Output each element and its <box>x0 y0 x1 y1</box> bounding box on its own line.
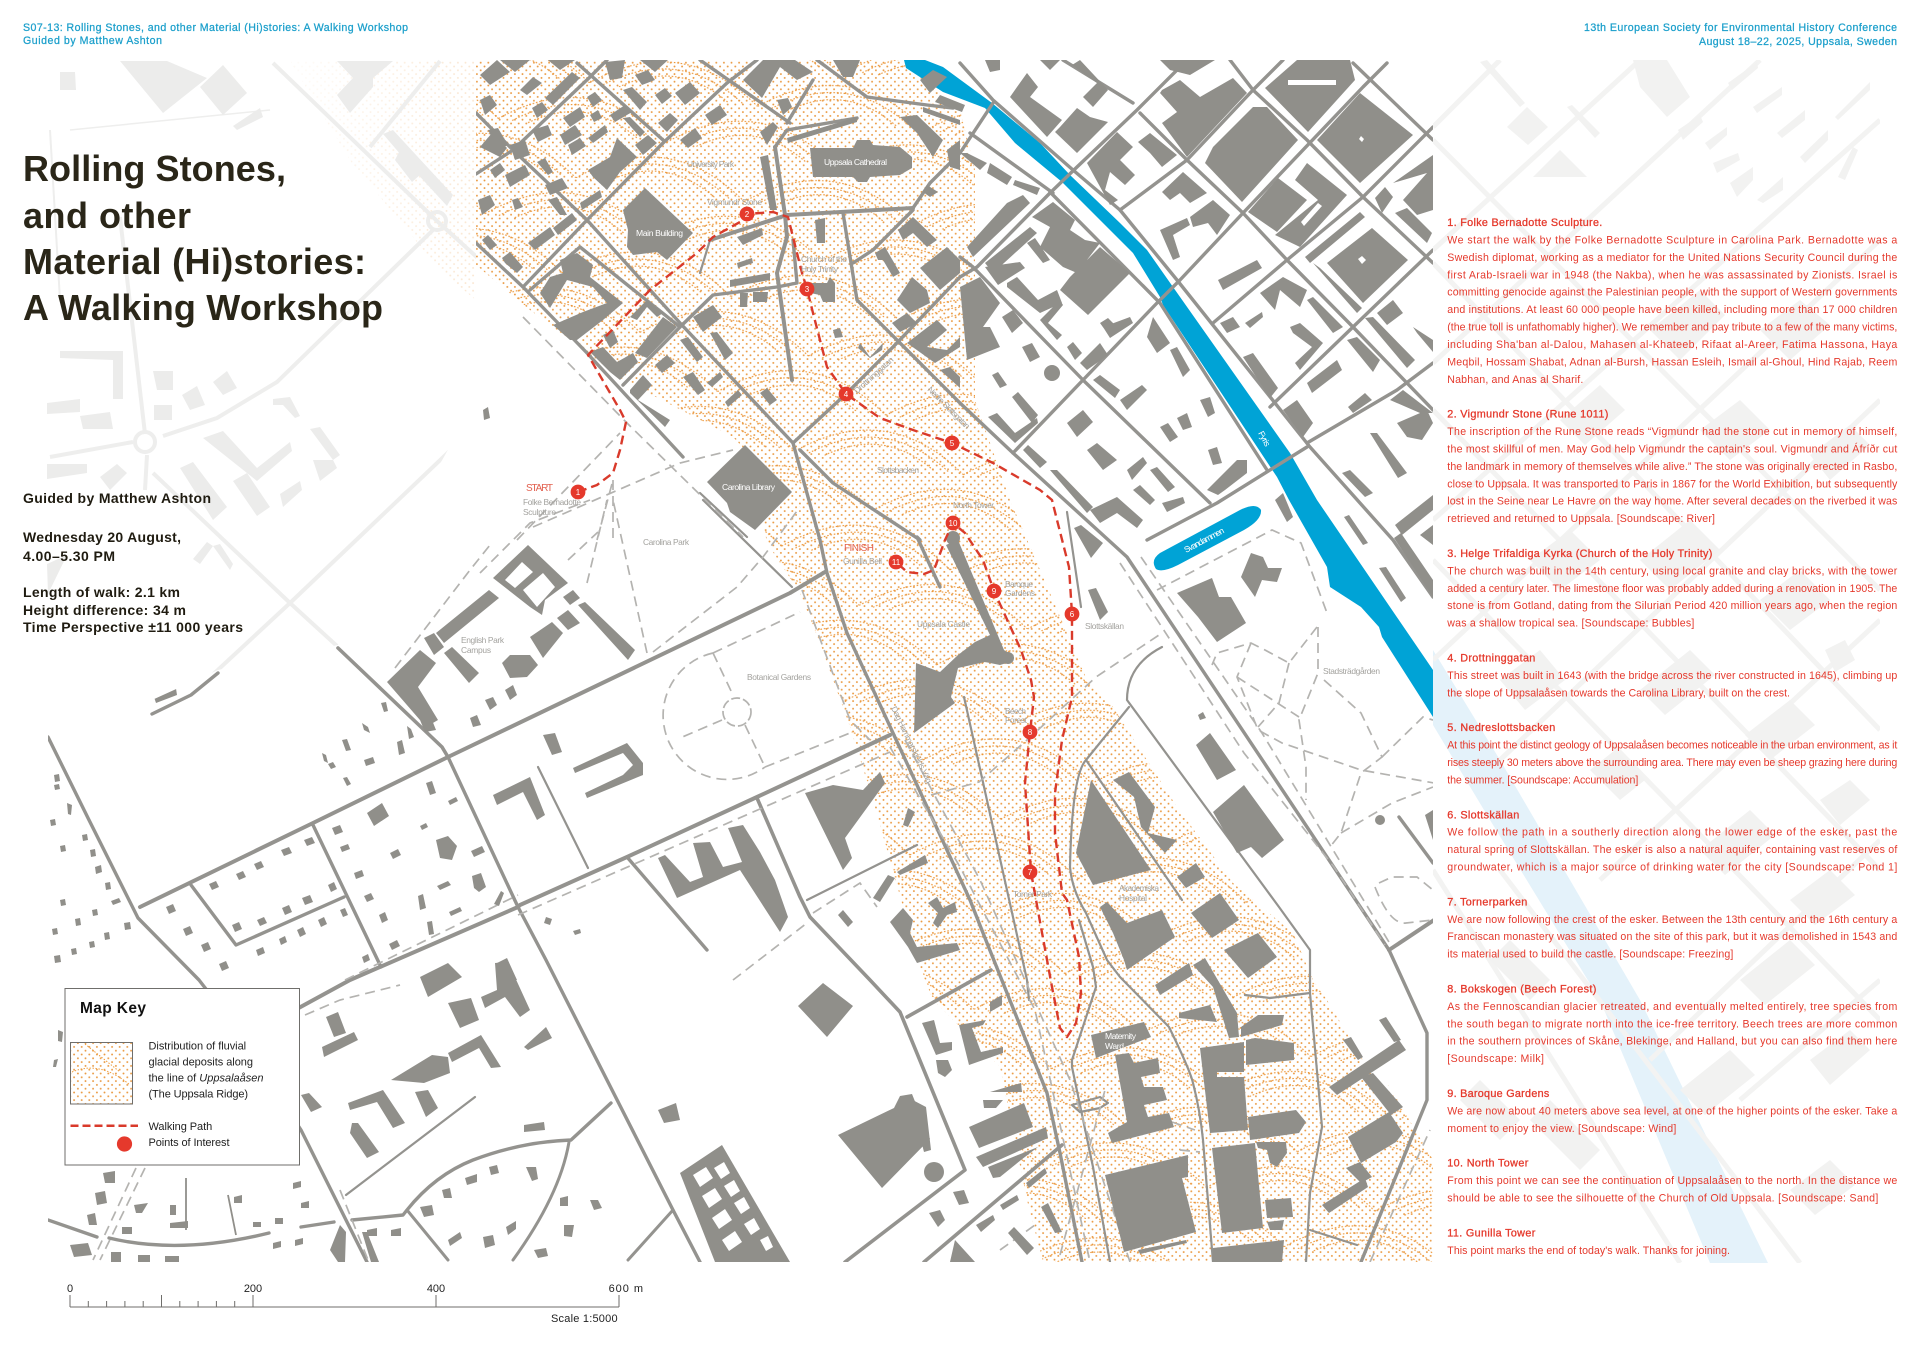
stop 8 text: As the Fennoscandian glacier retreated, and eventually melted entirely, tree species from <box>1447 1001 1897 1013</box>
title: Material (Hi)stories: <box>23 241 366 282</box>
stop 5 text: rises steeply 30 meters above the surrounding area. There may even be sheep grazing here during <box>1447 757 1897 769</box>
stop 1 text: Swedish diplomat, working as a mediator for the United Nations Security Council during the <box>1447 252 1897 264</box>
header left: session title <box>23 22 408 47</box>
stop 7 text <box>1447 896 1897 961</box>
map place labels: Carolina Library <box>722 482 776 492</box>
stop 2 text: the most skillful of men. May God help Vigmundr the captain's soul. Vigmundr and Áfríðr cut <box>1447 442 1897 456</box>
points of interest markers: 3 <box>805 285 810 294</box>
title <box>23 148 383 328</box>
stop 6 text: natural spring of Slottskällan. The esker is also a natural aquifer, containing vast reserves of <box>1447 844 1897 856</box>
walk details: Guided by Matthew Ashton <box>23 490 211 506</box>
stop 4 text <box>1447 652 1897 699</box>
walk details: 4.00–5.30 PM <box>23 548 115 564</box>
stop 8 text <box>1447 984 1897 1065</box>
small houses <box>50 702 581 1067</box>
map place labels: Folke Bernadotte <box>523 497 581 507</box>
points of interest markers: 2 <box>745 210 750 219</box>
pond Svandammen <box>1154 506 1261 570</box>
esker dot distribution <box>476 60 1433 1262</box>
map place labels: Fyris <box>1256 429 1273 448</box>
stop 4 text: the slope of Uppsalaåsen towards the Carolina Library, built on the crest. <box>1447 687 1790 699</box>
map key: the line of Uppsalaåsen <box>148 1072 263 1084</box>
ghost map: left faded continuation <box>47 60 480 680</box>
stop 7 text: 7. Tornerparken <box>1447 896 1527 908</box>
lower south road thin dashes <box>186 1178 236 1235</box>
stop 11 text: 11. Gunilla Tower <box>1447 1227 1536 1239</box>
header left: session title: S07-13: Rolling Stones, and other Material (Hi)stories: A Walking Workshop <box>23 22 408 34</box>
map place labels: North Tower <box>953 500 994 510</box>
stop 3 text: The church was built in the 14th century, using local granite and clay bricks, with the tower <box>1447 565 1898 577</box>
map key: (The Uppsala Ridge) <box>148 1088 248 1100</box>
map place labels: Ward <box>1105 1041 1124 1051</box>
map place labels: Maternity <box>1105 1031 1137 1041</box>
buildings: English Park campus and west <box>154 545 680 1262</box>
buildings: esker west slope <box>497 772 1062 1262</box>
map place labels: Stadsträdgården <box>1323 666 1380 676</box>
stop 10 text: 10. North Tower <box>1447 1158 1529 1170</box>
points of interest markers: 5 <box>950 439 955 448</box>
map place labels: Torner Park <box>1013 889 1053 899</box>
map place labels: Sculpture <box>523 507 556 517</box>
map place labels: University Park <box>687 159 735 169</box>
stop 5 text: At this point the distinct geology of Uppsalaåsen becomes noticeable in the urban environment, as it <box>1447 740 1897 752</box>
stop 2 text: close to Uppsala. It was transported to Paris in 1867 for the World Exhibition, but subsequently <box>1447 478 1898 490</box>
map place labels: Drottninggatan <box>852 354 896 395</box>
map key: Distribution of fluvial <box>148 1040 246 1052</box>
stop 7 text: We are now following the crest of the esker. Between the 13th century and the 16th century a <box>1447 914 1897 926</box>
header right: conference <box>1584 22 1897 48</box>
map place labels: START <box>526 483 553 494</box>
main map panel <box>48 60 1434 1262</box>
map place labels: Gunilla Bell <box>843 556 882 566</box>
stop 1 text: 1. Folke Bernadotte Sculpture. <box>1447 217 1602 229</box>
stop 6 text: We follow the path in a southerly direction along the lower edge of the esker, past the <box>1447 827 1897 839</box>
stop 9 text <box>1447 1088 1897 1135</box>
stop 3 text: was a shallow tropical sea. [Soundscape: Bubbles] <box>1446 618 1694 630</box>
stop 8 text: the south began to migrate north into the ice-free territory. Beech trees are more common <box>1447 1018 1897 1030</box>
stop 10 text <box>1447 1158 1897 1204</box>
map place labels: Botanical Gardens <box>747 672 811 682</box>
stop 3 text: added a century later. The limestone floor was probably added during a renovation in 1905. The <box>1447 583 1897 595</box>
map place labels: The Old Cemetery <box>404 397 467 406</box>
header right: conference: August 18–22, 2025, Uppsala, Sweden <box>1699 36 1897 48</box>
key: walking path sample <box>70 1124 138 1127</box>
stop 9 text: moment to enjoy the view. [Soundscape: Wind] <box>1447 1123 1676 1135</box>
map place labels: Forest <box>1005 715 1028 725</box>
stop 1 text: We start the walk by the Folke Bernadotte Sculpture in Carolina Park. Bernadotte was a <box>1447 234 1897 246</box>
key: point of interest sample <box>117 1136 132 1152</box>
points of interest markers: 4 <box>844 390 849 399</box>
stop 2 text: the landmark in memory of themselves while alive.” The stone was originally erected in Rasbo, <box>1447 461 1897 473</box>
map place labels: Uppsala Castle <box>917 619 970 629</box>
points of interest markers: 8 <box>1028 728 1033 737</box>
walk details <box>23 490 243 635</box>
stop 2 text: The inscription of the Rune Stone reads “Vigmundr had the stone cut in memory of himself, <box>1447 426 1897 438</box>
dashed footpaths <box>93 317 1434 1262</box>
stop 8 text: [Soundscape: Milk] <box>1447 1053 1544 1065</box>
points of interest markers: 9 <box>992 587 997 596</box>
scale bar: 600 m <box>609 1283 643 1295</box>
stop 6 text: 6. Slottskällan <box>1447 809 1519 821</box>
map place labels: Baroque <box>1005 579 1033 589</box>
stop 9 text: We are now about 40 meters above sea level, at one of the higher points of the esker. Take a <box>1447 1105 1897 1117</box>
stop 3 text: stone is from Gotland, dating from the Silurian Period 420 million years ago, when the region <box>1447 600 1897 612</box>
stop 1 text: including Sha'ban al-Dalou, Mahasen al-Khateeb, Rifaat al-Areer, Fatima Hassona, Haya <box>1447 339 1897 351</box>
stop 6 text <box>1447 809 1897 874</box>
stop 2 text: retrieved and returned to Uppsala. [Soundscape: River] <box>1447 513 1715 525</box>
buildings: south-east hospital quarter <box>1076 772 1406 1262</box>
walking path <box>578 212 1081 1037</box>
map key: Map Key <box>80 1000 146 1017</box>
map place labels: Hospital <box>1119 893 1147 903</box>
map key <box>65 988 300 1165</box>
walk details: Time Perspective ±11 000 years <box>23 619 243 635</box>
map place labels: Main Building <box>636 228 683 238</box>
map place labels: Slottsbacken <box>877 465 919 475</box>
map place labels: Akademiska <box>1119 883 1159 893</box>
buildings: east of the river <box>1160 60 1433 858</box>
garden ring <box>723 698 751 726</box>
stop 1 text: Nabhan, and Anas al Sharif. <box>1447 374 1583 386</box>
stop 8 text: in the southern provinces of Skåne, Blekinge, and Halland, but you can also find them here <box>1447 1036 1897 1048</box>
points of interest markers: 1 <box>576 488 581 497</box>
stop 2 text <box>1447 409 1898 525</box>
buildings: castle <box>914 531 1014 733</box>
stop 9 text: 9. Baroque Gardens <box>1447 1088 1550 1100</box>
building details: white cut-outs <box>1288 80 1366 264</box>
grid block <box>680 1145 790 1262</box>
stop 2 text: lost in the Seine near Le Havre on the way home. After several decades on the riverbed it was <box>1447 496 1897 508</box>
grid block courtyards <box>693 1162 773 1251</box>
river Fyris <box>904 60 1433 717</box>
stop 1 text: Meqbil, Hossam Shabat, Adnan al-Bursh, Hassan Esleih, Ismail al-Ghoul, Hind Rajab, Reem <box>1447 356 1897 368</box>
map place labels: Gardens <box>1005 588 1035 598</box>
scale bar: 0 <box>67 1283 73 1295</box>
map place labels: Holy Trinity <box>801 264 839 274</box>
stop 4 text: This street was built in 1643 (with the bridge across the river constructed in 1645), climbing up <box>1447 670 1897 682</box>
stop 1 text: (the true toll is unfathomably higher). We remember and pay tribute to a few of the many victims, <box>1447 322 1897 334</box>
stop 5 text: the summer. [Soundscape: Accumulation] <box>1447 774 1638 786</box>
stop 1 text: first Arab-Israeli war in 1948 (the Nakba), when he was assassinated by Zionists. Israel is <box>1447 269 1897 281</box>
stop 2 text: 2. Vigmundr Stone (Rune 1011) <box>1447 409 1608 421</box>
map place labels: Carolina Park <box>643 537 690 547</box>
map place labels: Vigmundr Stone <box>707 197 762 207</box>
map place labels: Svandammen <box>1182 525 1226 555</box>
map place labels <box>404 157 1380 1051</box>
map place labels: English Park <box>461 635 505 645</box>
stop 5 text <box>1447 722 1897 786</box>
scale bar <box>67 1283 643 1325</box>
key swatch: esker deposits <box>70 1042 132 1104</box>
map key: Walking Path <box>148 1121 212 1133</box>
map key: Points of Interest <box>148 1137 230 1149</box>
map place labels: Slottskällan <box>1085 621 1124 631</box>
map place labels: Dag Hammarskjölds Väg <box>889 705 935 785</box>
points of interest markers <box>571 207 1079 879</box>
title: Rolling Stones, <box>23 148 286 189</box>
map place labels: Church of the <box>801 254 847 264</box>
stop 11 text <box>1447 1227 1730 1257</box>
title: and other <box>23 195 191 236</box>
title: A Walking Workshop <box>23 287 383 328</box>
walk details: Wednesday 20 August, <box>23 529 181 545</box>
stop 10 text: should be able to see the silhouette of the Church of Old Uppsala. [Soundscape: Sand] <box>1447 1192 1878 1204</box>
map place labels: FINISH <box>844 543 874 554</box>
stop 3 text <box>1446 548 1898 630</box>
map key: glacial deposits along <box>148 1056 253 1068</box>
ghost map: right faded continuation with river <box>1433 60 1880 1263</box>
header left: session title: Guided by Matthew Ashton <box>23 35 162 47</box>
points of interest markers: 6 <box>1070 610 1075 619</box>
stop 10 text: From this point we can see the continuation of Uppsalaåsen to the north. In the distance we <box>1447 1175 1897 1187</box>
road network <box>48 60 1434 1262</box>
map place labels: Nedre Slottsgatan <box>926 384 972 431</box>
stop 5 text: 5. Nedreslottsbacken <box>1447 722 1555 734</box>
stop 4 text: 4. Drottninggatan <box>1447 652 1535 664</box>
stop 7 text: its material used to build the castle. [Soundscape: Freezing] <box>1447 949 1733 961</box>
campus courtyards <box>505 562 555 607</box>
stop 8 text: 8. Bokskogen (Beech Forest) <box>1447 984 1596 996</box>
stop 1 text: and institutions. At least 60 000 people have been killed, including more than 17 000 children <box>1447 304 1897 316</box>
stop 11 text: This point marks the end of today's walk. Thanks for joining. <box>1447 1245 1730 1257</box>
stop 7 text: Franciscan monastery was situated on the site of this park, but it was demolished in 1543 and <box>1447 931 1897 943</box>
points of interest markers: 10 <box>949 519 958 528</box>
stop 1 text <box>1447 217 1897 386</box>
scale bar: Scale 1:5000 <box>551 1313 618 1325</box>
map place labels: Uppsala Cathedral <box>824 157 887 167</box>
buildings: centre grid <box>875 60 1222 620</box>
walk details: Height difference: 34 m <box>23 602 186 618</box>
stop 3 text: 3. Helge Trifaldiga Kyrka (Church of the Holy Trinity) <box>1447 548 1712 560</box>
points of interest markers: 11 <box>892 558 901 567</box>
header right: conference: 13th European Society for Environmental History Conference <box>1584 22 1897 34</box>
map place labels: Beech <box>1005 706 1026 716</box>
points of interest markers: 7 <box>1028 868 1033 877</box>
stop 6 text: groundwater, which is a major source of drinking water for the city [Soundscape: Pond 1] <box>1447 862 1897 874</box>
scale bar: 400 <box>427 1283 445 1295</box>
scale bar: 200 <box>244 1283 262 1295</box>
stop 1 text: committing genocide against the Palestinian people, with the support of Western governments <box>1447 287 1897 299</box>
buildings: north-west quarter <box>478 60 912 530</box>
map place labels: Campus <box>461 645 491 655</box>
walk details: Length of walk: 2.1 km <box>23 584 180 600</box>
